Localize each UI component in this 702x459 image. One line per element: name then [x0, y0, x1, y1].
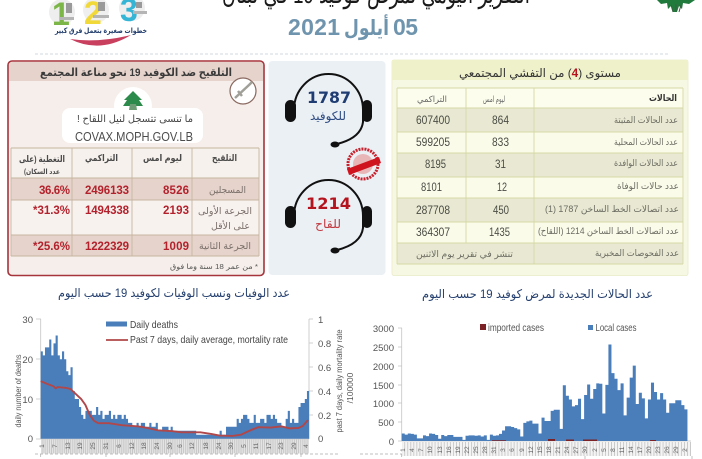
x axis day labels: 8 [610, 448, 617, 452]
x axis day labels: 17 [266, 442, 273, 450]
icon: stamp [347, 149, 381, 179]
table: cases: 12 [497, 182, 507, 194]
x axis day labels: 14 [628, 446, 635, 454]
icon: headset vaccine hotline [285, 180, 372, 254]
icon: headset vaccine hotline: للقاح [315, 217, 341, 231]
legend: cases: Local cases [596, 323, 636, 334]
table: vaccination figures: على الأقل [211, 220, 250, 232]
axis labels: /100000 [345, 372, 355, 403]
x axis day labels: 18 [203, 442, 210, 450]
icon: headset COVID hotline: 1787 [307, 88, 351, 107]
callout: register for vaccine: ما تنسى تتسجل لنيل اللقاح ! [77, 114, 193, 125]
legend: deaths [106, 319, 288, 346]
table: vaccination figures: التلقيح [212, 153, 237, 164]
table: vaccination figures: *31.3% [33, 205, 70, 217]
table: vaccination figures: التراكمي [85, 153, 118, 164]
table: cases: عدد اتصالات الخط الساخن 1214 (اللقاح) [538, 226, 679, 236]
x axis day labels: 31 [491, 446, 498, 454]
x axis day labels: 27 [573, 446, 580, 454]
x axis day labels: 11 [253, 442, 260, 449]
axis labels: past 7 days, daily mortality rate [334, 329, 344, 432]
table: cases: عدد الحالات الوافدة [614, 158, 678, 168]
heading: deaths chart: عدد الوفيات ونسب الوفيات لكوفيد 19 حسب اليوم [58, 286, 290, 301]
x axis day labels: 24 [154, 442, 161, 450]
table: cases: عدد الفحوصات المخبرية [595, 248, 679, 258]
axis labels: 1500 [373, 381, 394, 392]
logo: three small steps campaign [49, 0, 147, 46]
bars: daily deaths [41, 335, 309, 439]
x axis day labels: 6 [177, 444, 184, 448]
x axis day labels: 17 [637, 446, 644, 454]
table: cases: عدد الحالات المثبتة [614, 115, 678, 125]
axis labels: 0 [318, 434, 323, 445]
table: cases: 450 [493, 205, 509, 217]
line: 7-day average mortality [41, 381, 308, 436]
x axis day labels: 25 [90, 442, 97, 450]
footnote: * من عمر 18 سنة وما فوق [170, 262, 258, 271]
table: cases: تنشر في تقرير يوم الاثنين [416, 249, 513, 259]
table: vaccination figures: 36.6% [39, 185, 70, 197]
x axis day labels: 6 [509, 448, 516, 452]
table: cases [397, 88, 683, 264]
axis labels: 500 [378, 418, 394, 429]
table: vaccination figures: *25.6% [33, 241, 70, 253]
x axis day labels: 1 [39, 444, 46, 448]
x axis day labels: 5 [601, 448, 608, 452]
table: vaccination figures: الجرعة الأولى [198, 205, 252, 217]
axis labels: 1000 [373, 399, 394, 410]
x axis day labels: 30 [228, 442, 235, 450]
x axis day labels: 5 [241, 444, 248, 448]
panel: vaccination [8, 61, 264, 276]
date subtitle: 05 [393, 14, 418, 40]
axis labels: daily number of deaths [13, 354, 23, 428]
x axis day labels: 21 [555, 446, 562, 454]
x axis day labels: 13 [65, 442, 72, 450]
icon: headset vaccine hotline: 1214 [306, 194, 351, 213]
table: vaccination figures: 8526 [163, 185, 189, 197]
axis labels: 0 [389, 437, 394, 448]
panel: community transmission [392, 60, 688, 276]
axis labels: 10 [22, 395, 33, 406]
x axis day labels: 12 [189, 442, 196, 450]
table: cases: الحالات [649, 93, 677, 103]
x axis day labels: 6 [116, 444, 123, 448]
bars: imported cases [492, 439, 656, 441]
legend: cases: imported cases [488, 323, 544, 334]
x axis day labels: 18 [141, 442, 148, 450]
logo: cedar top right [657, 0, 695, 12]
legend: cases [480, 323, 636, 334]
axis labels: 3000 [373, 324, 394, 335]
x axis day labels: 1 [400, 448, 407, 452]
x axis day labels: 26 [664, 446, 671, 454]
heading: level 4: مستوى (4) من التفشي المجتمعي [459, 66, 621, 81]
x axis day labels: 18 [546, 446, 553, 454]
table: vaccination figures: 1494338 [85, 205, 130, 217]
heading: level 4 [392, 60, 688, 81]
table: vaccination figures: 1009 [163, 241, 189, 253]
table: cases: عدد الحالات المحلية [614, 137, 678, 147]
x axis day labels: 12 [129, 442, 136, 450]
date subtitle [288, 13, 418, 40]
x axis day labels: 3 [500, 448, 507, 452]
table: cases: 864 [492, 115, 510, 127]
x axis day labels: 20 [646, 446, 653, 454]
x axis day labels: 30 [167, 442, 174, 450]
panel: hotlines [268, 61, 386, 275]
x axis day labels: 23 [655, 446, 662, 454]
table: vaccination figures: ليوم امس [143, 153, 182, 164]
x axis day labels: 4 [303, 444, 310, 448]
x axis day labels: 16 [446, 446, 453, 454]
chart: daily deaths and mortality rate [13, 315, 355, 454]
x axis day labels: 22 [464, 446, 471, 454]
x axis day labels: 7 [418, 448, 425, 452]
bars: local cases [402, 344, 687, 441]
x axis day labels: 12 [528, 446, 535, 454]
axis labels: 0.8 [318, 339, 331, 350]
x axis day labels: 24 [564, 446, 571, 454]
table: vaccination figures: 2193 [163, 205, 189, 217]
x axis day labels: 29 [673, 446, 680, 454]
logo: three small steps campaign: خطوات صغيرة بتعمل فرق كبير [54, 26, 147, 35]
axis labels: 2000 [373, 362, 394, 373]
x axis day labels: 30 [582, 446, 589, 454]
axis labels [13, 315, 355, 445]
x axis day labels: 4 [409, 448, 416, 452]
table: cases: 31 [495, 159, 506, 171]
x axis day labels: 7 [52, 444, 59, 448]
x axis day labels: 11 [619, 446, 626, 453]
table: vaccination figures: 1222329 [85, 241, 129, 253]
axis labels: 1 [318, 315, 323, 326]
x axis day labels: 10 [427, 446, 434, 454]
x axis day labels: 31 [103, 442, 110, 450]
table: cases: ليوم امس [483, 94, 505, 104]
axis labels: 20 [22, 355, 33, 366]
table: cases: عدد اتصالات الخط الساخن 1787 (1) [545, 204, 679, 214]
heading: vaccination [9, 62, 263, 81]
table: cases: 833 [492, 137, 509, 149]
legend: deaths: Past 7 days, daily average, mortality rate [130, 334, 288, 346]
legend: deaths: Daily deaths [130, 319, 178, 331]
x axis day labels: 28 [482, 446, 489, 454]
table: cases: عدد حالات الوفاة [617, 181, 679, 191]
axis labels: 0 [28, 434, 33, 445]
x axis day labels: 23 [278, 442, 285, 450]
axis labels: 0.4 [318, 387, 331, 398]
table: vaccination figures: عدد السكان) [24, 168, 60, 176]
date subtitle: 2021 [288, 14, 340, 40]
table: cases: 599205 [416, 137, 450, 149]
x axis day labels: 15 [537, 446, 544, 454]
axis labels: 0.6 [318, 363, 331, 374]
table: cases: 287708 [416, 205, 450, 217]
table: cases: 364307 [416, 227, 450, 239]
x axis day labels [400, 446, 689, 454]
table: cases: التراكمي [417, 94, 447, 104]
icon: headset COVID hotline [285, 74, 372, 148]
table: vaccination figures: التغطية (على [19, 154, 65, 164]
table: cases: 8101 [421, 182, 442, 194]
callout: register for vaccine [62, 87, 203, 144]
x axis day labels: 9 [519, 448, 526, 452]
heading: cases chart: عدد الحالات الجديدة لمرض كوفيد 19 حسب اليوم [422, 287, 653, 302]
table: vaccination figures: المسجلين [209, 185, 246, 196]
x axis day labels: 19 [77, 442, 84, 450]
axis labels [373, 324, 394, 448]
x axis day labels: 25 [473, 446, 480, 454]
axis labels: 2500 [373, 343, 394, 354]
table: cases: 1435 [489, 227, 510, 239]
x axis day labels: 19 [455, 446, 462, 454]
axis labels: 0.2 [318, 411, 331, 422]
x axis day labels: 29 [291, 442, 298, 450]
table: cases: 8195 [425, 159, 446, 171]
table: vaccination figures: 2496133 [85, 185, 129, 197]
table: cases: 607400 [416, 115, 450, 127]
heading: vaccination: التلقيح ضد الكوفيد 19 نحو مناعة المجتمع [40, 67, 232, 79]
table: vaccination figures [11, 148, 259, 256]
icon: headset COVID hotline: للكوفيد [310, 109, 346, 124]
chart: new cases per day [373, 323, 691, 456]
x axis day labels [39, 442, 310, 450]
x axis day labels: 24 [216, 442, 223, 450]
icon: syringe badge [230, 78, 256, 104]
x axis day labels: 13 [437, 446, 444, 454]
callout: register for vaccine: COVAX.MOPH.GOV.LB [75, 130, 193, 144]
axis labels: 30 [22, 315, 33, 326]
x axis day labels: 2 [682, 448, 689, 452]
date subtitle: أيلول [344, 13, 389, 40]
x axis day labels: 2 [592, 448, 599, 452]
table: vaccination figures: الجرعة الثانية [199, 241, 251, 252]
